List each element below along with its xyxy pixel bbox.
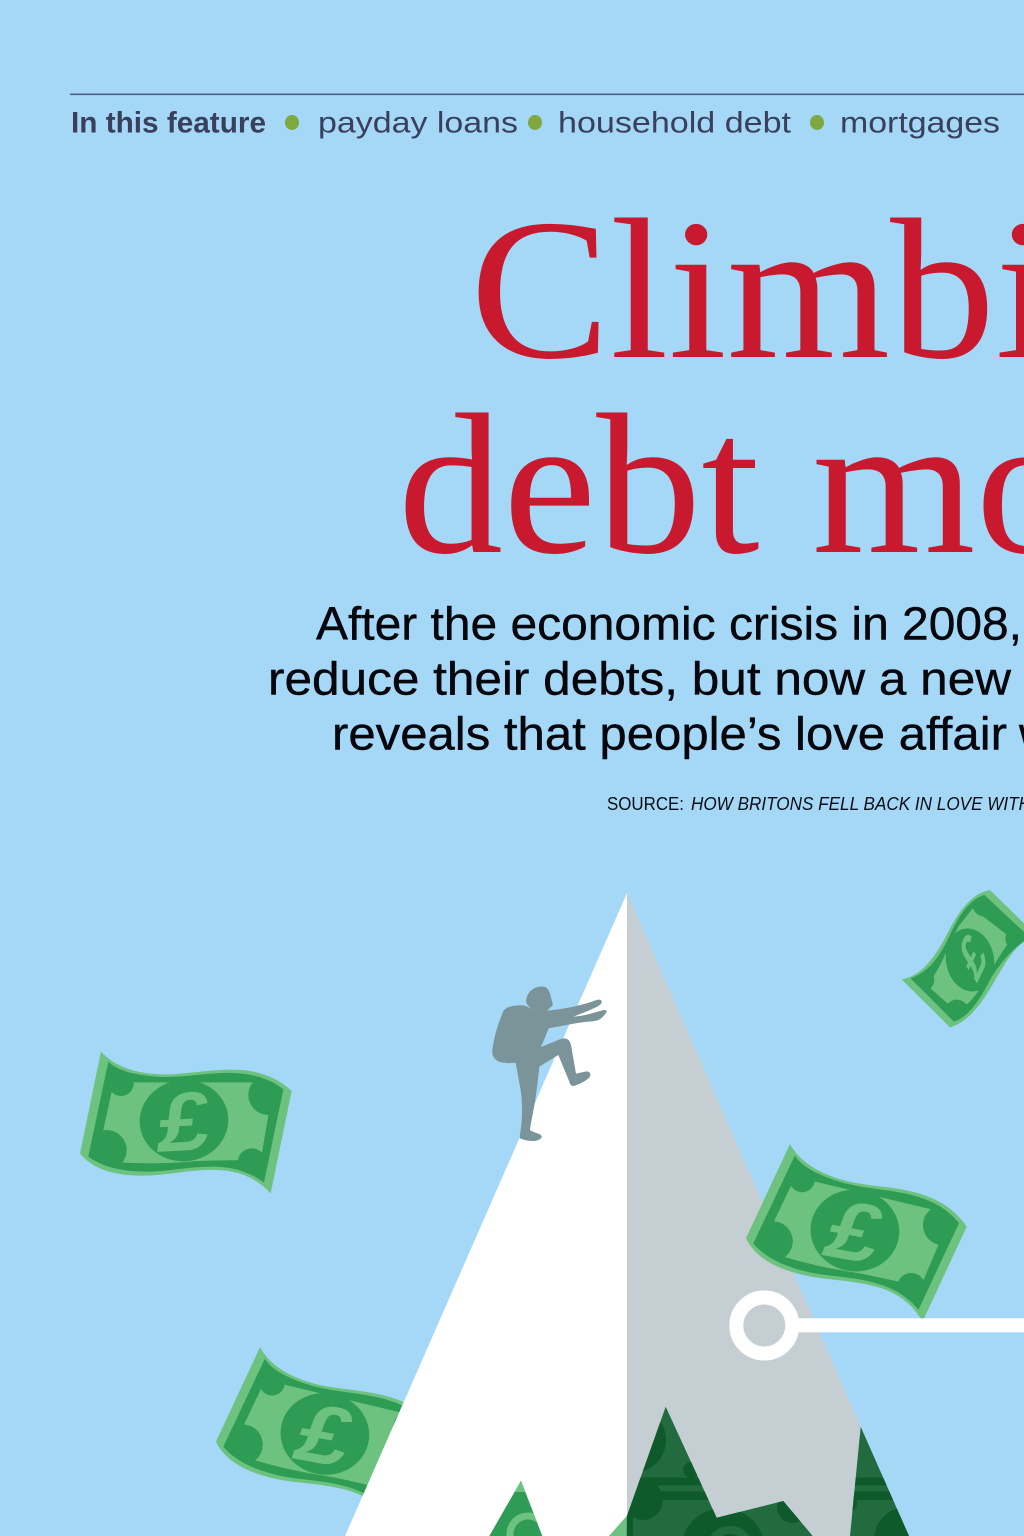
foreground peaks: light green slope: [609, 1516, 627, 1536]
foreground peaks: small green peak: [489, 1480, 542, 1536]
mountain: [345, 893, 861, 1536]
title: [398, 179, 1024, 596]
top rule: [70, 94, 1024, 95]
topic: household debt: household debt: [558, 106, 792, 140]
topic: mortgages: mortgages: [840, 106, 1000, 140]
mountain: lit white face: [345, 893, 627, 1536]
banknote: top right: [902, 890, 1024, 1027]
banknote: right of mountain: [737, 1139, 976, 1327]
banknote: right of mountain: £: [814, 1183, 897, 1281]
altitude marker ring and line: [736, 1298, 1024, 1354]
bullet: [285, 115, 299, 130]
mountain: grey shaded face: [627, 893, 861, 1536]
bullet: [528, 115, 542, 130]
standfirst text: reveals that people’s love affair: [332, 708, 1007, 760]
climber silhouette: [492, 986, 607, 1141]
banknote: far left: £: [153, 1073, 216, 1170]
banknote: lower left, behind mountain: £: [284, 1386, 367, 1484]
standfirst text: After the economic crisis in 2008,: [316, 598, 1022, 650]
standfirst text: [268, 598, 1024, 760]
foreground peaks: dark green banknote peaks: [626, 1406, 909, 1536]
source line: SOURCE:: [607, 794, 684, 814]
label: in this feature: In this feature: [71, 106, 266, 140]
topic: payday loans: payday loans: [318, 106, 518, 140]
banknote: far left: [80, 1052, 292, 1193]
feature tag line: [71, 106, 1000, 140]
banknote: top right: £: [951, 919, 994, 994]
bullet: [810, 115, 824, 130]
banknote: lower left, behind mountain: [207, 1342, 446, 1530]
standfirst text: reduce their debts, but now a new: [268, 652, 1012, 704]
